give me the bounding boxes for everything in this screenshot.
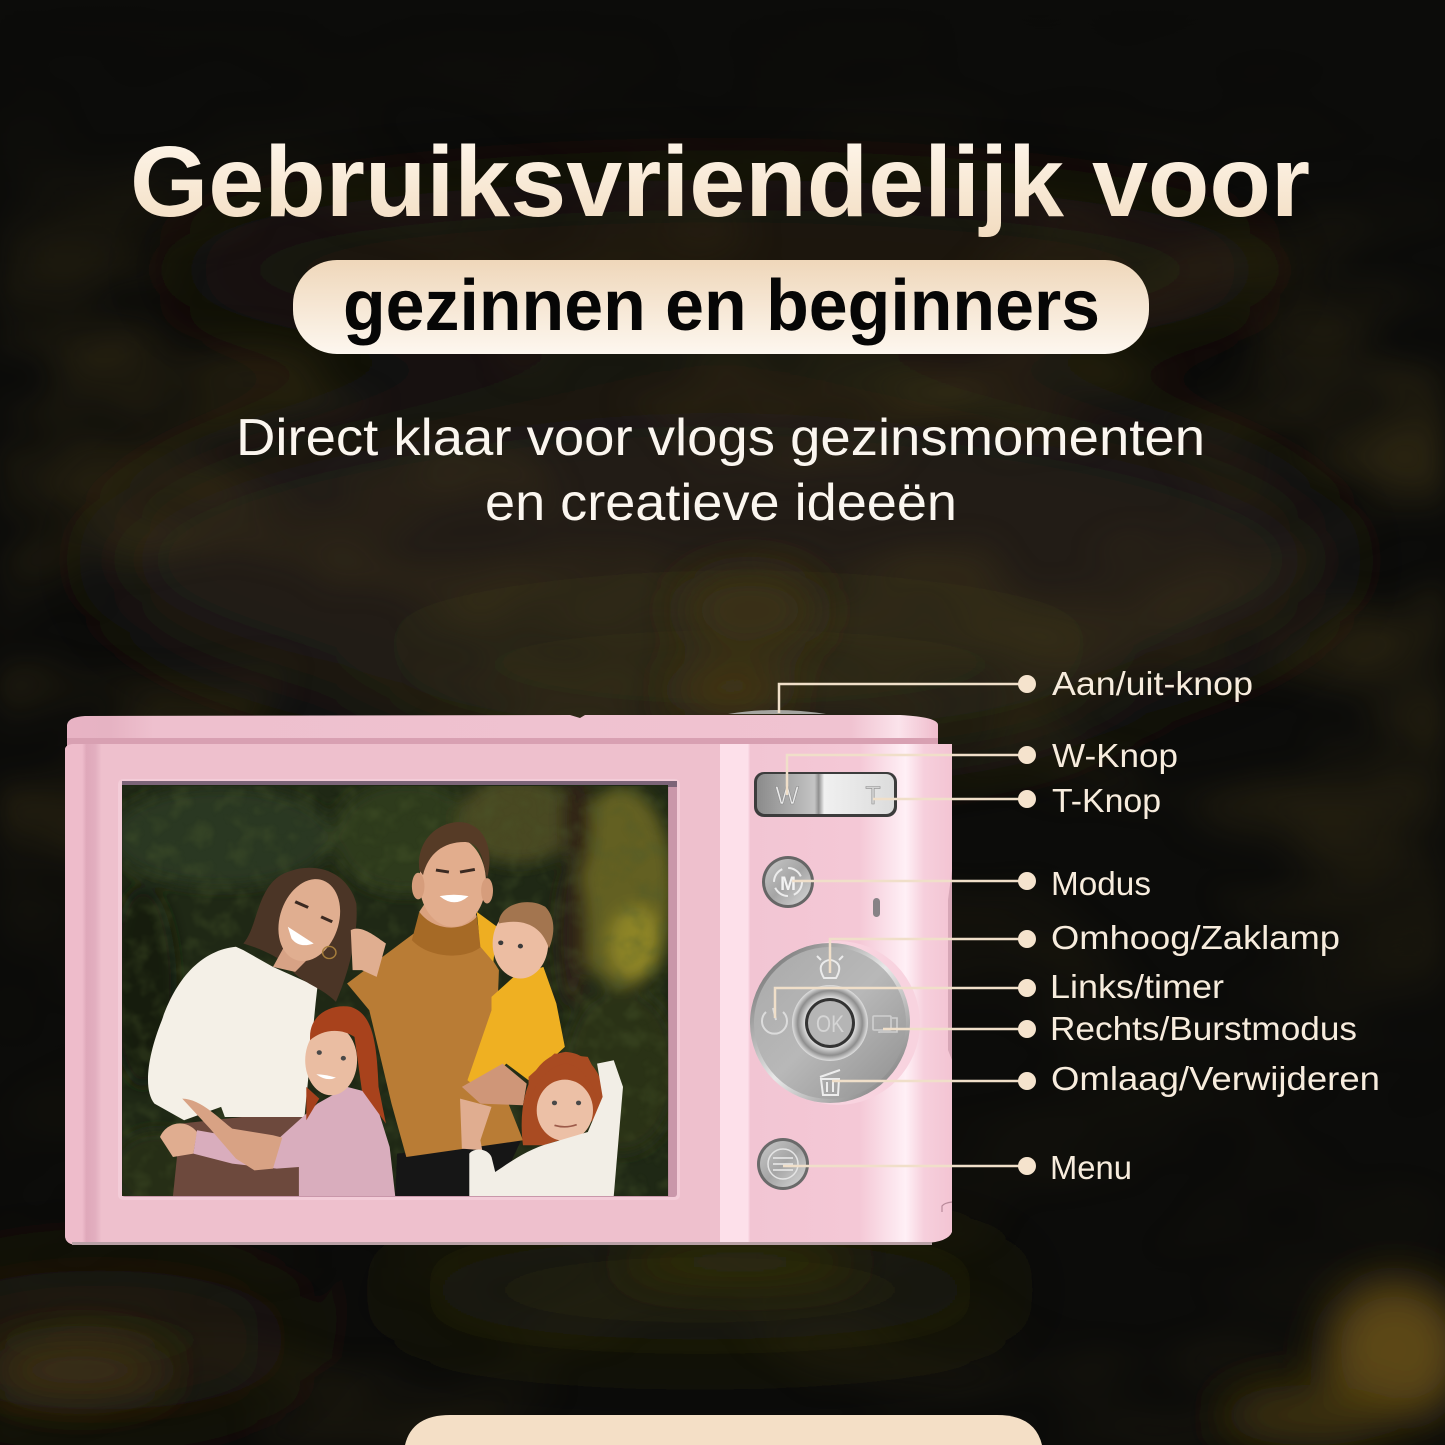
icon: flashlight	[817, 950, 843, 978]
callout: W-Knop	[787, 737, 1178, 795]
callout: Menu: Menu	[1050, 1149, 1132, 1186]
callout: T-Knop: T-Knop	[1052, 782, 1161, 819]
callout: Links/timer	[775, 968, 1224, 1018]
girl in white sweater	[469, 1052, 623, 1196]
icon: timer	[762, 1008, 787, 1034]
description text: en creatieve ideeën	[485, 474, 957, 532]
callout: Rechts/Burstmodus	[883, 1010, 1357, 1047]
callout: Modus: Modus	[1051, 865, 1151, 902]
camera controls	[750, 772, 920, 1190]
icon: burst	[873, 1016, 897, 1033]
mode button	[762, 856, 814, 908]
girl in pink cardigan	[160, 1006, 395, 1196]
callout: Omhoog/Zaklamp: Omhoog/Zaklamp	[1051, 919, 1340, 956]
status LED	[873, 898, 880, 917]
callout: Omlaag/Verwijderen	[832, 1060, 1380, 1097]
camera body	[65, 710, 952, 1245]
callout: Rechts/Burstmodus: Rechts/Burstmodus	[1050, 1010, 1357, 1047]
callout: Links/timer: Links/timer	[1050, 968, 1224, 1005]
bottom cream tab	[405, 1415, 1042, 1445]
menu button	[757, 1138, 809, 1190]
title: Gebruiksvriendelijk voor	[130, 126, 1310, 238]
callout: W-Knop: W-Knop	[1052, 737, 1178, 774]
callout: Modus	[792, 865, 1151, 902]
callout: Aan/uit-knop	[779, 665, 1253, 713]
callout: Omlaag/Verwijderen: Omlaag/Verwijderen	[1051, 1060, 1380, 1097]
baby in yellow	[460, 902, 565, 1150]
icon: trash	[820, 1070, 840, 1095]
woman	[148, 868, 386, 1196]
description text	[236, 409, 1205, 532]
mode button: M	[780, 874, 796, 895]
W/T zoom rocker	[754, 772, 897, 817]
camera screen	[110, 763, 680, 1210]
callout: Aan/uit-knop: Aan/uit-knop	[1052, 665, 1253, 702]
callout: Omhoog/Zaklamp	[830, 919, 1340, 973]
man	[347, 822, 523, 1196]
callout: T-Knop	[873, 782, 1161, 819]
callout: Menu	[783, 1149, 1132, 1186]
W/T zoom rocker: T	[865, 782, 881, 810]
subtitle pill: gezinnen en beginners	[343, 266, 1100, 346]
description text: Direct klaar voor vlogs gezinsmomenten	[236, 409, 1205, 467]
W/T zoom rocker: W	[775, 782, 799, 810]
family photo	[122, 786, 668, 1196]
navigation dial	[750, 941, 920, 1105]
camera	[65, 710, 952, 1245]
photo backdrop	[122, 786, 668, 1196]
navigation dial: OK	[816, 1011, 844, 1038]
